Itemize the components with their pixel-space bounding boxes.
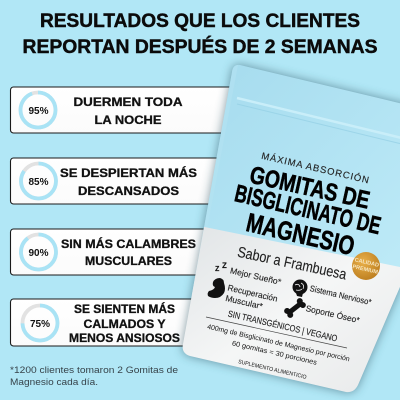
panel: 75%	[10, 299, 250, 346]
text: duermen: DUERMEN TODA	[74, 95, 183, 109]
text: duermen: LA NOCHE	[94, 113, 162, 127]
benefit: sueño: Mejor Sueño*	[229, 265, 283, 287]
badge: PREMIUM	[352, 264, 379, 276]
bag blue top	[192, 65, 400, 294]
gauge: 75%	[22, 306, 58, 340]
icon: bone	[283, 297, 307, 319]
divider	[206, 317, 347, 348]
supplement label: SUPLEMENTO ALIMENTICIO	[237, 359, 308, 381]
text: calmados	[69, 301, 180, 345]
headline: magnesio: MAGNESIO	[244, 207, 357, 261]
text: despiertan	[60, 165, 197, 198]
bag shadow	[183, 65, 400, 392]
headline: máxima absorción: MÁXIMA ABSORCIÓN	[260, 151, 370, 186]
footnote: Magnesio cada día.	[10, 377, 98, 388]
product bag	[182, 65, 400, 392]
gauge: 85%: 85%	[28, 177, 49, 188]
badge: CALIDAD	[354, 257, 379, 269]
bag left edge fold	[204, 74, 232, 230]
text: calmados: CALMADOS Y	[84, 317, 166, 331]
panel: 90%	[10, 229, 250, 275]
gauge: 75%: 75%	[30, 319, 50, 330]
gauge: 85%	[21, 164, 56, 198]
gauge: 90%: 90%	[28, 248, 49, 259]
dosage: 60 gomitas = 30 porciones	[231, 340, 318, 367]
benefit: soporte óseo: Soporte Óseo*	[305, 303, 361, 325]
icon: brain	[292, 280, 308, 297]
title: REPORTAN DESPUÉS DE 2 SEMANAS	[22, 36, 377, 58]
text: calambres: SIN MÁS CALAMBRES	[61, 236, 196, 251]
benefit: sistema nervioso: Sistema Nervioso*	[309, 283, 373, 307]
text: despiertan: SE DESPIERTAN MÁS	[60, 165, 197, 180]
text: calambres	[61, 236, 196, 268]
flavour: Sabor a Frambuesa	[236, 244, 349, 284]
icon: zz: z	[222, 260, 227, 271]
gauge: 90%	[21, 234, 56, 270]
title: RESULTADOS QUE LOS CLIENTES	[40, 11, 360, 32]
icon: zz	[215, 260, 227, 273]
text: despiertan: DESCANSADOS	[78, 184, 179, 198]
headline: gomitas de: GOMITAS DE	[247, 162, 372, 215]
dosage: 400mg de Bisglicinato de Magnesio por porción	[206, 324, 350, 363]
icon: zz: z	[215, 263, 220, 273]
benefit: recuperación: Muscular*	[225, 293, 264, 311]
text: calmados: MENOS ANSIOSOS	[69, 331, 180, 345]
footnote: *1200 clientes tomaron 2 Gomitas de	[10, 365, 178, 376]
gauge: 95%	[20, 92, 56, 128]
benefit: recuperación: Recuperación	[227, 282, 279, 304]
text: duermen	[74, 95, 183, 127]
panel: 85%	[10, 158, 250, 204]
text: calmados: SE SIENTEN MÁS	[74, 301, 175, 316]
footnote	[10, 365, 178, 388]
title	[22, 11, 377, 58]
gauge: 95%: 95%	[28, 106, 49, 117]
claims: sin transgénicos: SIN TRANSGÉNICOS | VEGANO	[227, 309, 338, 344]
panel: 95%	[10, 87, 250, 133]
badge	[352, 252, 380, 280]
bag white bottom	[182, 227, 400, 392]
icon: muscle	[208, 278, 225, 298]
bag zip seal	[237, 98, 400, 140]
text: calambres: MUSCULARES	[85, 254, 172, 268]
